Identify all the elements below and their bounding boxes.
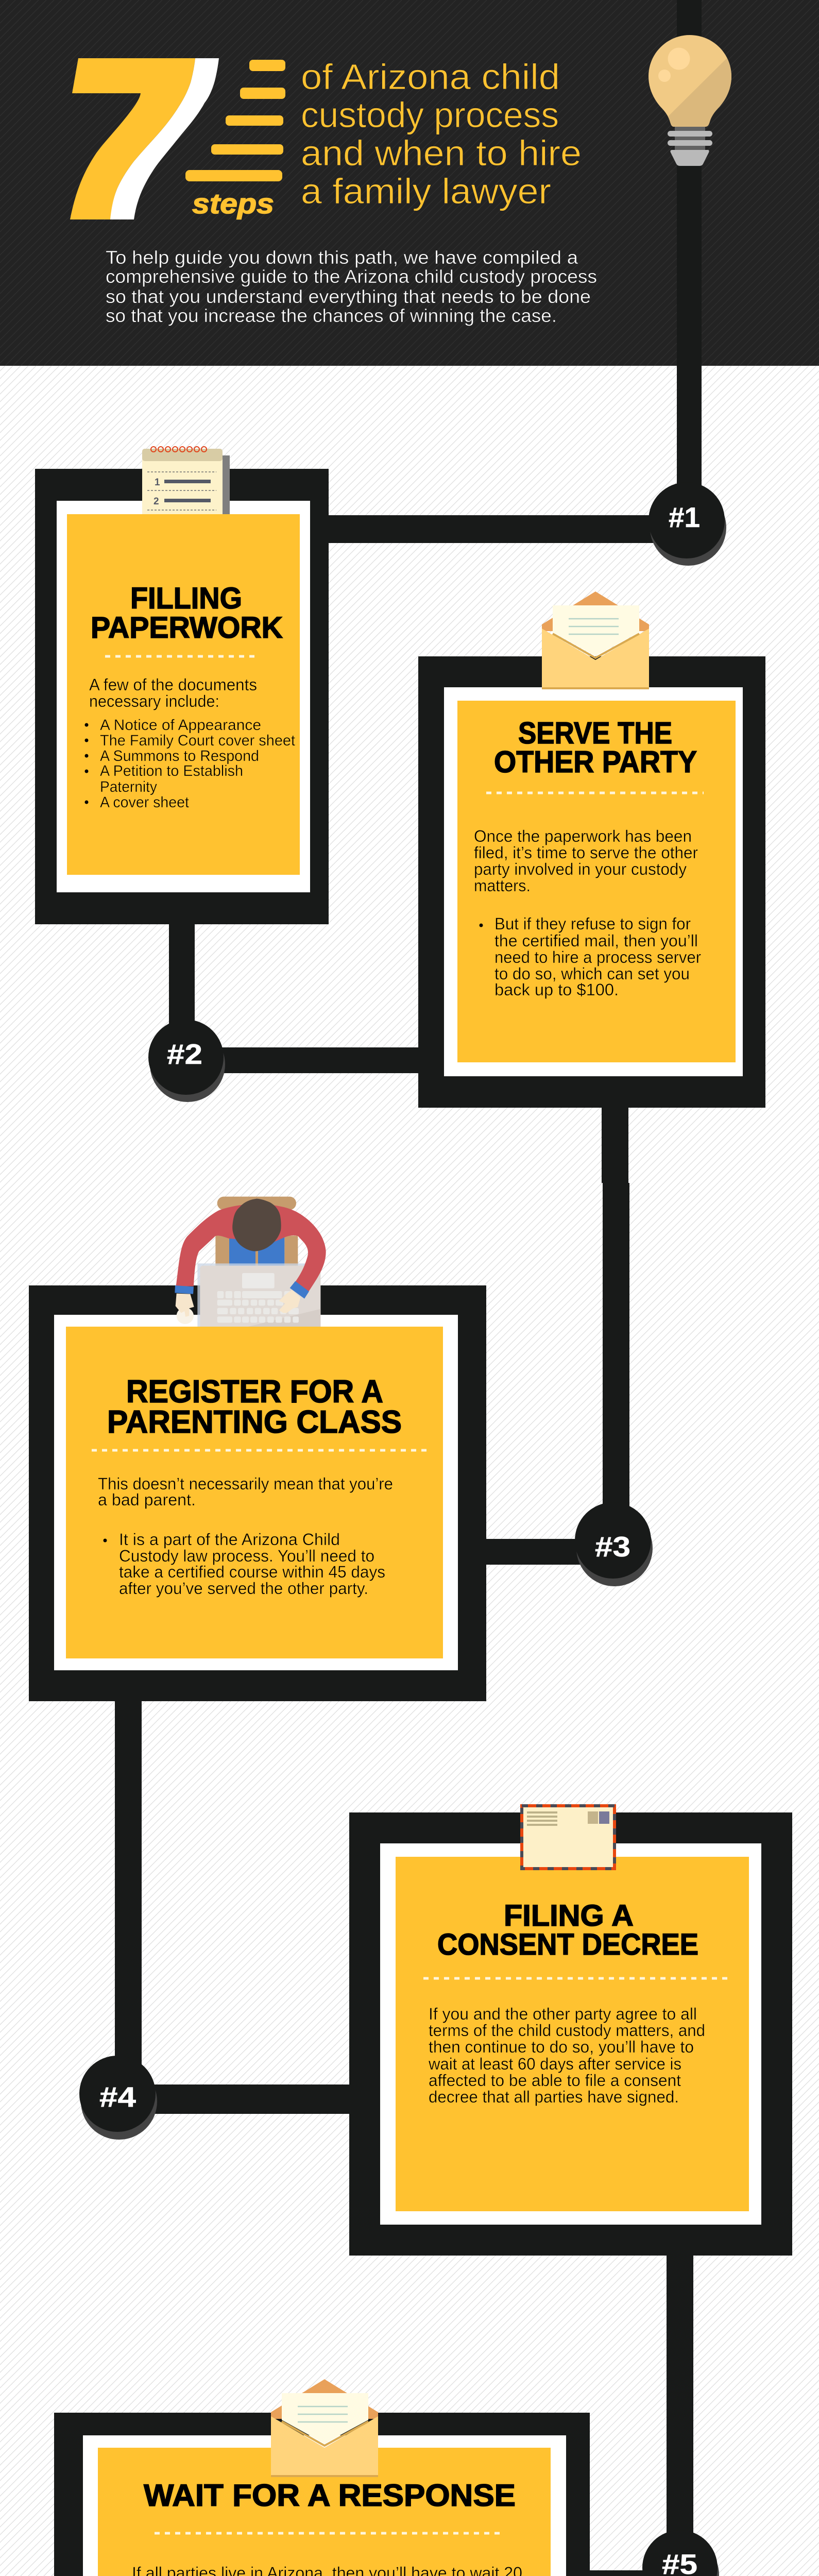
marker #5 bbox=[642, 2530, 719, 2576]
big numeral 7 bbox=[70, 58, 219, 219]
panel: step 2 serve the other party bbox=[418, 591, 765, 1108]
body text: then continue to do so, you’ll have to bbox=[429, 2038, 694, 2056]
title: a family lawyer bbox=[301, 171, 551, 211]
intro text: comprehensive guide to the Arizona child custody process bbox=[106, 266, 597, 287]
title: custody process bbox=[301, 95, 559, 135]
body text: matters. bbox=[474, 876, 531, 895]
icon: open envelope bbox=[271, 2379, 378, 2477]
marker #1: #1 bbox=[669, 501, 700, 533]
heading: PAPERWORK bbox=[91, 611, 283, 645]
icon: notepad: 1 bbox=[155, 477, 160, 488]
title: of Arizona child bbox=[301, 57, 560, 97]
body text: after you’ve served the other party. bbox=[119, 1579, 368, 1598]
stacked step bars bbox=[185, 60, 285, 181]
body text: necessary include: bbox=[89, 692, 219, 710]
marker #3 bbox=[575, 1502, 653, 1586]
body text: A Notice of Appearance bbox=[100, 717, 261, 734]
body text: back up to $100. bbox=[494, 980, 619, 999]
heading: WAIT FOR A RESPONSE bbox=[144, 2478, 516, 2513]
panel: step 4 filing a consent decree bbox=[349, 1804, 792, 2256]
intro text bbox=[106, 247, 597, 326]
intro text: so that you increase the chances of winning the case. bbox=[106, 305, 557, 326]
body text: The Family Court cover sheet bbox=[100, 732, 296, 749]
icon: notepad bbox=[142, 447, 230, 514]
marker #4: #4 bbox=[99, 2081, 136, 2113]
marker #3: #3 bbox=[595, 1531, 630, 1563]
body text: decree that all parties have signed. bbox=[429, 2088, 679, 2106]
body text: If you and the other party agree to all bbox=[429, 2005, 697, 2023]
icon: airmail letter bbox=[520, 1804, 616, 1870]
heading bbox=[107, 1374, 402, 1440]
icon: open envelope bbox=[542, 591, 649, 689]
heading bbox=[91, 582, 283, 645]
title bbox=[301, 57, 582, 211]
body text: A cover sheet bbox=[100, 794, 190, 811]
body text: A Summons to Respond bbox=[100, 748, 259, 765]
icon: notepad: 2 bbox=[153, 496, 159, 507]
heading bbox=[437, 1899, 698, 1961]
body text: party involved in your custody bbox=[474, 860, 687, 878]
heading bbox=[494, 716, 697, 779]
body text: Custody law process. You’ll need to bbox=[119, 1547, 374, 1565]
body text: It is a part of the Arizona Child bbox=[119, 1530, 340, 1549]
body text: affected to be able to file a consent bbox=[429, 2071, 681, 2090]
icon: person at laptop bbox=[175, 1197, 326, 1327]
body text: A few of the documents bbox=[89, 675, 257, 694]
body text: A Petition to Establish bbox=[100, 762, 243, 779]
body text: Paternity bbox=[100, 778, 157, 795]
body text: Once the paperwork has been bbox=[474, 827, 692, 845]
marker #2: #2 bbox=[167, 1038, 202, 1070]
body text: wait at least 60 days after service is bbox=[428, 2055, 681, 2073]
heading: FILLING bbox=[130, 582, 242, 615]
connector path linking all steps bbox=[103, 0, 702, 2576]
body text: the certified mail, then you’ll bbox=[494, 931, 698, 950]
body text bbox=[428, 2005, 705, 2106]
body text: take a certified course within 45 days bbox=[119, 1563, 385, 1581]
panel: step 1 filling paperwork bbox=[35, 447, 329, 924]
body text: terms of the child custody matters, and bbox=[429, 2021, 705, 2040]
marker #1 bbox=[649, 482, 726, 566]
heading: REGISTER FOR A bbox=[126, 1374, 383, 1410]
icon: light bulb bbox=[649, 35, 731, 166]
body text: But if they refuse to sign for bbox=[494, 914, 691, 933]
body text: need to hire a process server bbox=[494, 948, 701, 967]
title: and when to hire bbox=[301, 133, 582, 173]
body text bbox=[98, 1475, 393, 1598]
body text bbox=[84, 675, 296, 811]
intro text: To help guide you down this path, we have compiled a bbox=[106, 247, 578, 268]
panel: header background bbox=[0, 0, 819, 366]
heading: CONSENT DECREE bbox=[437, 1928, 698, 1961]
body text: a bad parent. bbox=[98, 1490, 196, 1509]
body text bbox=[474, 827, 701, 999]
heading: PARENTING CLASS bbox=[107, 1404, 402, 1440]
marker #2 bbox=[148, 1020, 225, 1102]
body text: to do so, which can set you bbox=[494, 964, 690, 983]
body text: This doesn’t necessarily mean that you’re bbox=[98, 1475, 393, 1493]
marker #4 bbox=[79, 2056, 157, 2140]
heading: OTHER PARTY bbox=[494, 745, 697, 779]
body text: filed, it’s time to serve the other bbox=[474, 843, 698, 862]
label: steps: steps bbox=[192, 188, 274, 219]
heading: FILING A bbox=[504, 1899, 634, 1933]
intro text: so that you understand everything that needs to be done bbox=[106, 286, 591, 307]
panel: step 5 wait for a response bbox=[54, 2379, 590, 2576]
heading: SERVE THE bbox=[518, 716, 672, 750]
panel: step 3 register for a parenting class bbox=[29, 1197, 486, 1701]
